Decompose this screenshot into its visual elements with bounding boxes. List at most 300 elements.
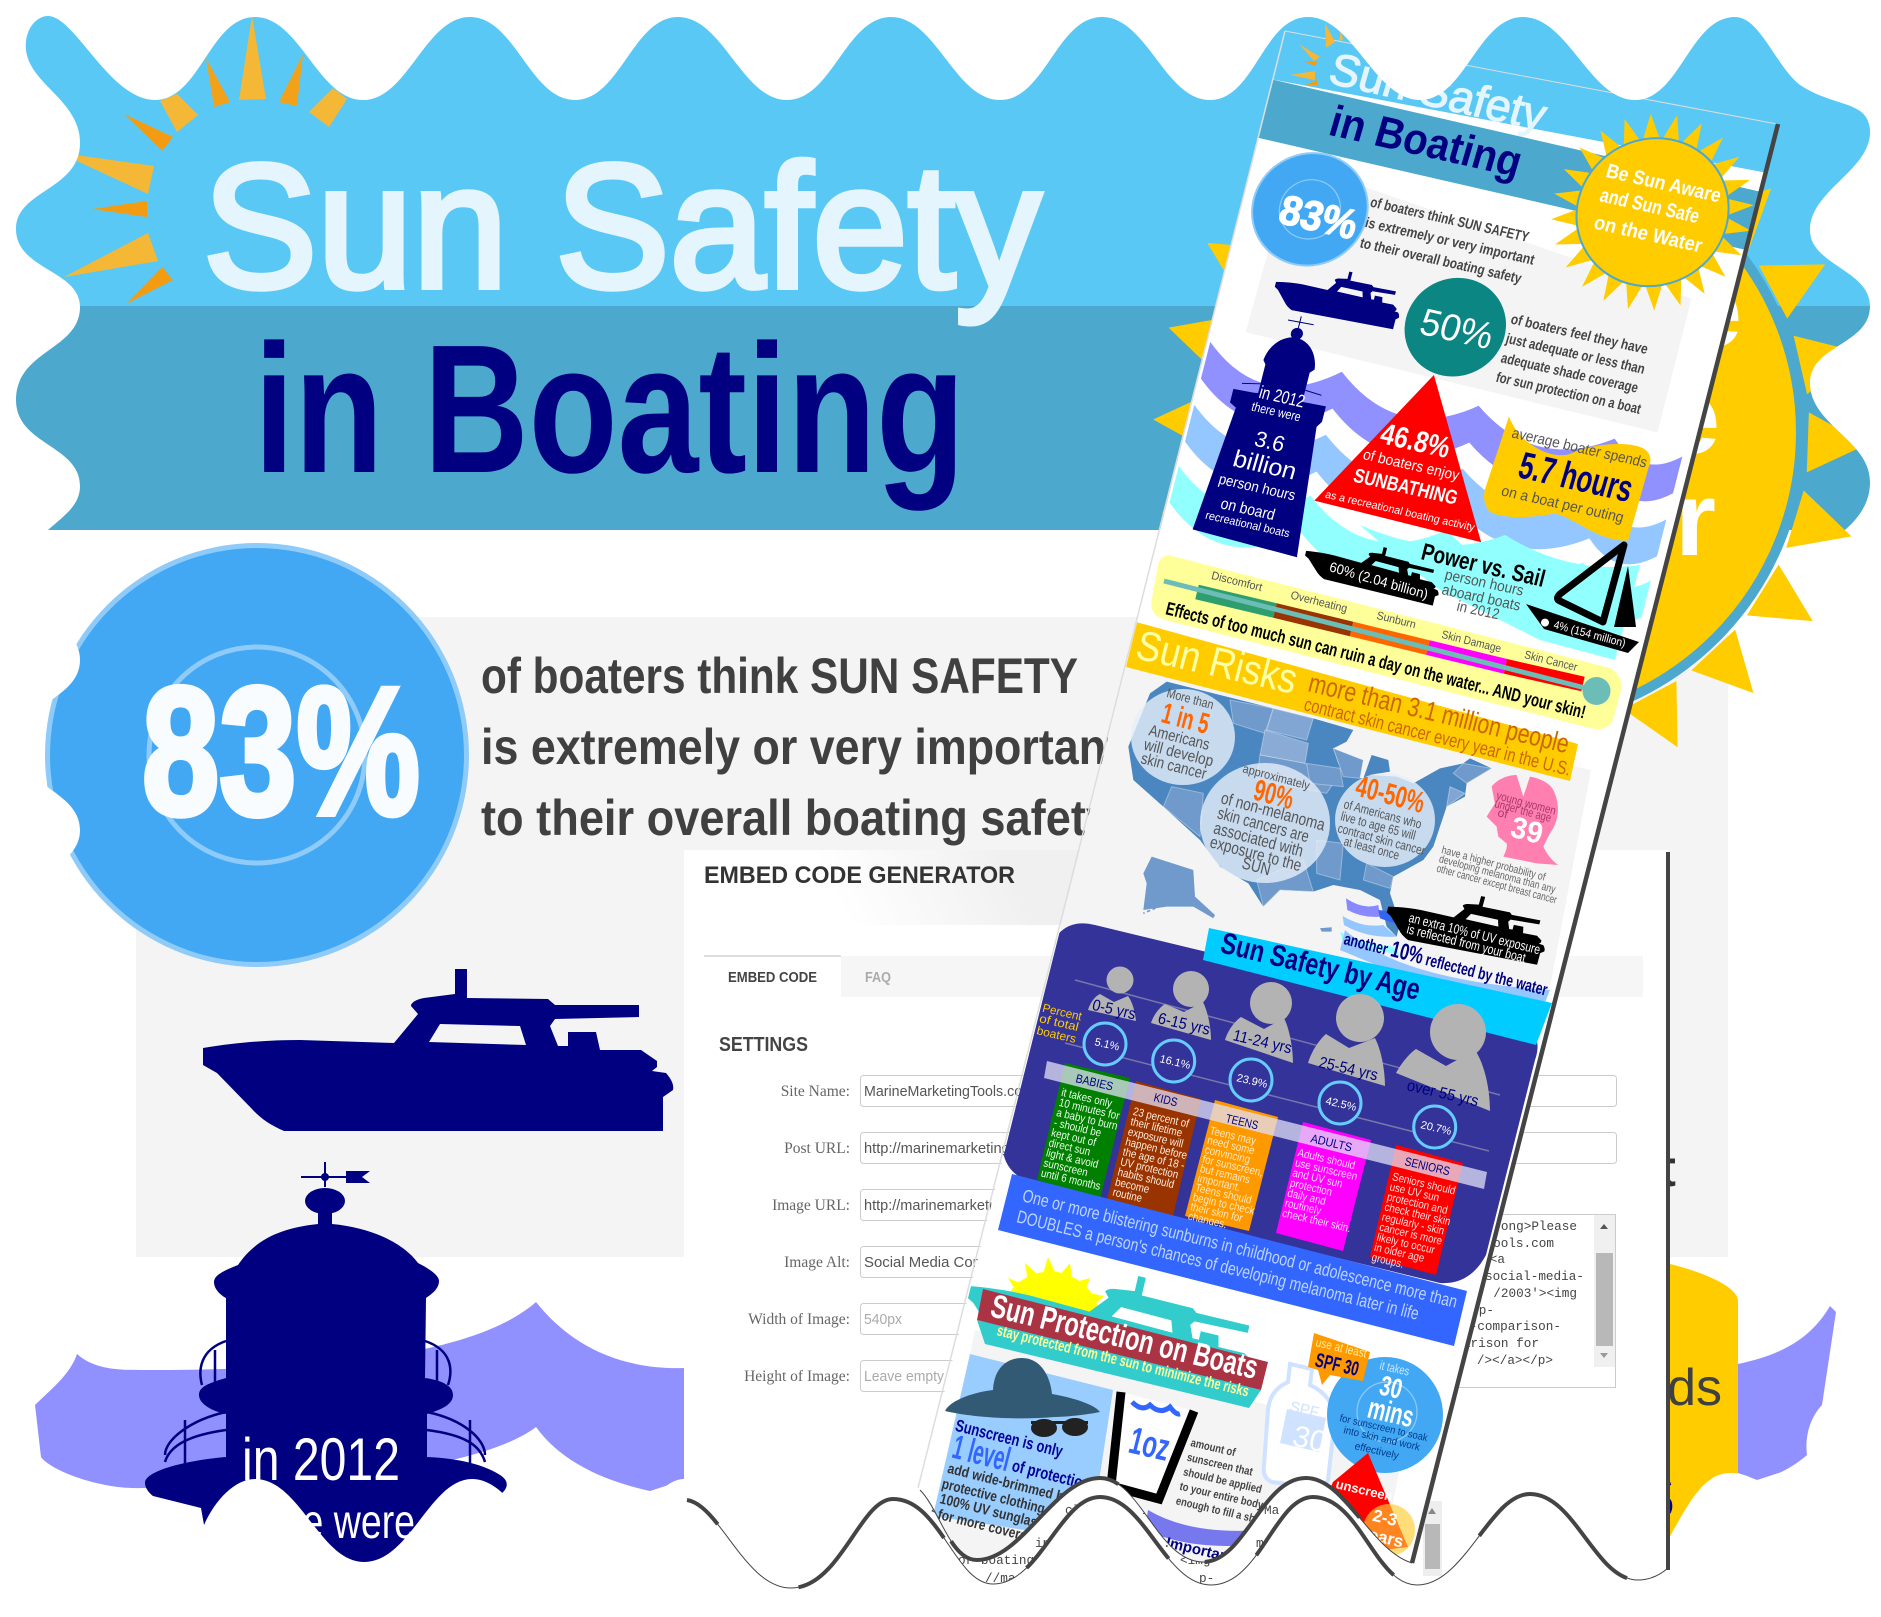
settings form: Social Media Comparison	[864, 1255, 1034, 1271]
icon: shot glass 1oz: 1oz	[1125, 1420, 1174, 1470]
column text: adults: check their skin.	[1281, 1207, 1352, 1235]
settings form: MarineMarketingTools.com	[864, 1084, 1034, 1100]
text: amount of sunscreen: to your entire body -	[1178, 1480, 1271, 1513]
text: amount of sunscreen: enough to fill a shot	[1174, 1495, 1265, 1528]
column text: seniors: use UV sun	[1388, 1181, 1441, 1205]
embed code textarea: <a	[1490, 1252, 1505, 1267]
effects severity bar	[1164, 581, 1610, 705]
grey block: sun risks map background	[1050, 667, 1591, 1040]
bubble text: 1 in 5: Americans	[1147, 722, 1211, 754]
bubble text: 1 in 5: skin cancer	[1139, 750, 1209, 783]
lower code box	[931, 1501, 1442, 1586]
yellow flag: 5.7 hours: 5.7 hours	[1514, 445, 1638, 511]
column text: teens: for sunscreen,	[1201, 1153, 1264, 1180]
column text: kids: their lifetime	[1129, 1115, 1184, 1140]
icon: black power boat	[1305, 547, 1439, 606]
column headings: KIDS	[1152, 1090, 1179, 1109]
icon: small yellow sun	[1005, 1257, 1104, 1325]
column text: kids: habits should	[1116, 1166, 1176, 1191]
effects labels: Sunburn	[1375, 610, 1417, 631]
blue box: hat and sunscreen tip	[933, 1354, 1113, 1548]
stat circle 83% on page: 83%	[1274, 186, 1363, 248]
column text: adults: routinely	[1283, 1197, 1323, 1218]
age labels: 0-5 yrs	[1090, 997, 1137, 1023]
column text: kids: routine	[1111, 1186, 1143, 1205]
icon: boat silhouette	[203, 969, 673, 1131]
percent values: 42.5%	[1324, 1095, 1358, 1114]
ribbon text fragments: hours	[1432, 1440, 1676, 1539]
bubble text: 40-50%: 40-50%	[1352, 770, 1428, 820]
effects caption: Effects of too much sun can ruin a day on the water... AND your skin!	[1164, 598, 1588, 722]
bubble text: 1 in 5	[1140, 688, 1213, 779]
lower code box: in	[1035, 1536, 1050, 1551]
age labels: over 55 yrs	[1405, 1077, 1480, 1110]
bubble text: 40-50%: at least once	[1342, 833, 1401, 863]
bubble text: 1 in 5: 1 in 5	[1158, 697, 1213, 741]
settings form: Post URL:	[784, 1140, 850, 1157]
column text: kids: exposure will	[1126, 1126, 1185, 1151]
settings form: Image URL:	[772, 1197, 850, 1214]
big sun text: Safe	[1498, 359, 1720, 476]
yellow flag: 5.7 hours: on a boat per outing	[1499, 483, 1626, 526]
settings form	[744, 1076, 1616, 1392]
text: 50% of boaters: adequate shade coverage	[1499, 351, 1640, 397]
effects labels: Overheating	[1289, 590, 1348, 615]
text: 83% of boaters	[1360, 198, 1535, 286]
icon: sunscreen bottle: SPF	[1288, 1398, 1321, 1421]
blue box: hat and sunscreen tip: for more coverage	[936, 1507, 1042, 1548]
band: sun protection on boats	[977, 1287, 1268, 1408]
effects labels	[1210, 570, 1579, 674]
embed code textarea: /></a></p>	[1477, 1353, 1553, 1368]
text: melanoma risk: other cancer except breast cancer	[1435, 863, 1558, 907]
lower code box: or-boating	[958, 1553, 1034, 1568]
cyan wave behind power vs sail	[1360, 525, 1640, 660]
wavy white mask: lower poster edges	[0, 530, 1881, 1617]
age labels: 11-24 yrs	[1231, 1027, 1294, 1057]
icon: sunscreen bottle: 30	[1289, 1420, 1330, 1459]
red triangle: 46.8% sunbathing: of boaters enjoy	[1361, 446, 1462, 484]
column text: seniors: protection and	[1386, 1191, 1449, 1217]
column headings: ADULTS	[1309, 1131, 1354, 1154]
bubble text: 40-50%: of Americans who	[1342, 796, 1423, 832]
column text: seniors: regularly - skin	[1380, 1211, 1446, 1238]
blue circle: 30 mins: into skin and work	[1342, 1425, 1422, 1454]
lighthouse on page: there were	[1250, 399, 1303, 424]
column text: seniors: groups.	[1370, 1251, 1405, 1271]
heading: Sun Safety by Age: Sun Safety by Age	[1217, 927, 1424, 1007]
panel: sun safety by age	[1002, 923, 1552, 1283]
lighthouse on page: recreational boats	[1204, 510, 1291, 540]
blue circle: 30 mins: for sunscreen to soak	[1338, 1413, 1429, 1444]
icon: sailboat: 4% (154 million)	[1552, 619, 1627, 650]
band: Sun Safety by Age	[1203, 928, 1552, 1045]
percent values: 16.1%	[1158, 1053, 1192, 1072]
effects labels: Skin Cancer	[1523, 649, 1579, 674]
page background	[934, 80, 1764, 1510]
red triangle: 46.8% sunbathing	[1314, 375, 1482, 542]
settings form: Width of Image:	[748, 1311, 850, 1328]
red triangle: 46.8% sunbathing: SUNBATHING	[1351, 465, 1460, 509]
ribbon: blistering sunburns: DOUBLES a person's chances of developing melanoma later in life	[1015, 1206, 1421, 1324]
red triangle: 46.8% sunbathing: 46.8%	[1377, 418, 1454, 465]
column headings: SENIORS	[1403, 1154, 1452, 1178]
band: sun risks: Sun Risks	[1132, 621, 1302, 703]
column text: seniors: cancer is more	[1378, 1221, 1444, 1248]
lighthouse on page: 3.6	[1252, 426, 1288, 457]
column text: kids: become	[1114, 1176, 1151, 1196]
embed code textarea: /2003'><img	[1493, 1286, 1577, 1301]
icon: lighthouse	[145, 1162, 507, 1600]
column text: babies: it takes only	[1060, 1086, 1114, 1111]
column headings: TEENS	[1224, 1111, 1260, 1132]
power vs sail	[1305, 542, 1639, 653]
tabs: EMBED CODE	[728, 970, 817, 986]
page title: in Boating: in Boating	[1324, 97, 1528, 187]
boat text: UV exposure: an extra 10% of UV exposure	[1407, 910, 1542, 957]
bubble text: 90%: of non-melanoma	[1219, 788, 1327, 835]
column text: teens: convincing	[1203, 1144, 1252, 1167]
icon: shot glass 1oz	[1111, 1392, 1194, 1499]
lower code box: .@	[1163, 1536, 1179, 1551]
grey block: sun protection	[930, 1330, 1405, 1570]
speech bubble: SPF 30: SPF 30	[1313, 1350, 1361, 1381]
stat circle 83% on page	[1251, 152, 1369, 267]
bubble text: 90%: SUN	[1240, 853, 1273, 879]
tip text: Sunscreen is only	[953, 1416, 1065, 1461]
label: percent of total boaters: boaters	[1035, 1023, 1078, 1046]
text block: 83% explanation	[481, 648, 1121, 846]
small sun rays on page header	[1290, 23, 1343, 85]
panel heading: EMBED CODE GENERATOR	[704, 862, 1015, 889]
blue circle: 30 mins: effectively	[1353, 1441, 1401, 1462]
icon: sunglasses	[1031, 1418, 1088, 1437]
blue circle: 30 mins: it takes	[1378, 1358, 1411, 1379]
boat text: UV exposure	[1406, 915, 1540, 962]
embed code textarea: <strong>Please	[1470, 1219, 1577, 1234]
big sun with rays	[1152, 74, 1868, 790]
upper page items over waves	[1473, 97, 1776, 550]
speech bubble: SPF 30: use at least	[1314, 1335, 1369, 1361]
reflection scallops	[1340, 930, 1550, 1002]
waves on page	[1159, 342, 1689, 634]
stat bubbles over map	[1131, 689, 1435, 883]
lower code box: m	[1256, 1536, 1264, 1551]
settings form: 540px	[864, 1312, 903, 1328]
column text: seniors: in older age	[1373, 1241, 1426, 1265]
age labels: 6-15 yrs	[1156, 1010, 1212, 1039]
periwinkle wave near bottom	[1145, 1510, 1260, 1546]
column text: teens: important.	[1196, 1172, 1242, 1194]
column text: kids: the age of 18 -	[1121, 1146, 1186, 1172]
percent values: 20.7%	[1419, 1119, 1453, 1138]
effects panel	[1151, 555, 1621, 729]
speech bubble: SPF 30	[1308, 1333, 1370, 1385]
column text: teens: but remains	[1199, 1163, 1251, 1187]
percent values	[1093, 1036, 1453, 1138]
lower code box: ib	[1142, 1503, 1157, 1518]
US map	[1128, 682, 1492, 937]
periwinkle wave	[35, 1302, 684, 1491]
yellow flag: 5.7 hours: average boater spends	[1510, 425, 1649, 471]
column text: adults: use sunscreen	[1294, 1157, 1359, 1183]
text: 50% of boaters: just adequate or less than	[1503, 331, 1647, 378]
bubble text: 90%: associated with	[1212, 818, 1305, 861]
sun badge: Be Sun Aware: on the Water	[1591, 212, 1705, 257]
bubble text: 40-50%: contract skin cancer	[1336, 820, 1427, 858]
page title: Sun Safety: Sun Safety	[1324, 43, 1553, 141]
text: 83% of boaters: is extremely or very important	[1363, 215, 1536, 269]
icon: pink head with age 39: under the age	[1493, 796, 1553, 825]
lighthouse on page: billion	[1230, 445, 1300, 485]
column text: adults: Adults should	[1296, 1147, 1357, 1172]
icon: black boat with UV reflection	[1386, 896, 1545, 965]
sun badge: Be Sun Aware: and Sun Safe	[1597, 185, 1702, 228]
lower code box: Ma	[1264, 1503, 1280, 1518]
bubble text: 40-50%	[1338, 776, 1426, 860]
small waves by reflection boat	[1340, 898, 1400, 955]
settings form: Site Name:	[781, 1083, 850, 1100]
icon: pink head with age 39: 39	[1507, 811, 1546, 851]
text block: 83% explanation: is extremely or very important	[481, 719, 1121, 775]
header band: darker blue	[0, 306, 1881, 530]
label: percent of total boaters: Percent	[1041, 1001, 1084, 1024]
panel: embed code generator	[684, 850, 1668, 1597]
percent values: 23.9%	[1235, 1072, 1269, 1091]
column text: kids: UV protection	[1119, 1156, 1180, 1182]
column text: babies: direct sun	[1047, 1137, 1092, 1159]
lighthouse text: there were	[238, 1496, 415, 1549]
power vs sail: 60% (2.04 billion)	[1328, 558, 1430, 602]
age columns	[1037, 1063, 1463, 1275]
stat circle 50%: 50%	[1415, 302, 1498, 358]
red triangle: 46.8% sunbathing: as a recreational boating activity	[1324, 489, 1477, 534]
column text: babies: a baby to burn	[1055, 1106, 1119, 1133]
column text: babies: - should be	[1052, 1117, 1103, 1140]
icon: wide-brimmed hat	[945, 1358, 1100, 1418]
label: percent of total boaters: of total	[1038, 1011, 1080, 1034]
lighthouse text: in 2012	[242, 1426, 400, 1493]
bubble text: 90%: 90%	[1250, 774, 1297, 816]
icon: sun rays around title	[64, 16, 347, 304]
text: another 10% reflected: another 10% reflected by the water	[1342, 924, 1551, 1001]
text: melanoma risk	[1435, 844, 1558, 907]
column text: babies: until 6 months	[1040, 1167, 1102, 1193]
bubble text: 1 in 5: will develop	[1141, 736, 1215, 770]
title: Sun Safety: Sun Safety	[203, 129, 1041, 325]
lower code box: //ma	[985, 1571, 1016, 1586]
icon: sunscreen bottle	[1264, 1364, 1335, 1488]
embed code textarea: wp-	[1471, 1303, 1494, 1318]
column text: babies: kept out of	[1050, 1127, 1097, 1149]
power vs sail: in 2012	[1455, 598, 1501, 623]
lavender age bar	[1044, 1061, 1487, 1189]
panel wave outline	[687, 852, 1668, 1588]
column text: babies: 10 minutes for	[1057, 1096, 1121, 1123]
periwinkle wave right	[1738, 1306, 1836, 1480]
band: sun risks: contract skin cancer every year in the U.S.	[1302, 694, 1573, 781]
white fill below panel wave	[684, 1494, 1668, 1617]
percent values: 5.1%	[1093, 1036, 1121, 1054]
percent rings	[1084, 1023, 1456, 1148]
column text: kids: happen before	[1124, 1136, 1189, 1162]
sun badge: Be Sun Aware: Be Sun Aware	[1603, 160, 1724, 207]
sun badge: Be Sun Aware	[1551, 114, 1754, 310]
text: 50% of boaters: of boaters feel they have	[1509, 312, 1650, 358]
wavy white mask: top, left and right edges	[0, 0, 1881, 530]
lighthouse on page: person hours	[1217, 471, 1297, 504]
blue box: hat and sunscreen tip: 1 level	[949, 1428, 1014, 1479]
stat circle: 83%	[45, 543, 469, 967]
column text: adults: and UV sun	[1291, 1167, 1344, 1191]
effects labels: Skin Damage	[1440, 629, 1502, 655]
settings form: Height of Image:	[744, 1368, 850, 1385]
power vs sail: person hours	[1443, 566, 1525, 600]
blue circle: 30 mins	[1327, 1357, 1443, 1473]
age figures	[1088, 966, 1490, 1111]
title: in Boating: in Boating	[254, 306, 965, 511]
big sun text: Aware	[1429, 252, 1742, 369]
band: sun risks: more than 3.1 million people	[1306, 668, 1572, 759]
text: melanoma risk: have a higher probability of	[1440, 844, 1547, 884]
column headings	[1074, 1071, 1452, 1178]
page grey block	[1246, 188, 1691, 432]
column text: teens: Teens may	[1208, 1125, 1258, 1148]
icon: boat on page	[1274, 272, 1400, 330]
ribbon text fragments	[1432, 1140, 1722, 1539]
big sun text: Water	[1428, 461, 1716, 578]
text block: 83% explanation: to their overall boating safety	[481, 790, 1111, 846]
bubble text: 90%: exposure to the	[1208, 832, 1303, 875]
big sun text	[1428, 252, 1742, 578]
column text: teens: changes.	[1187, 1210, 1228, 1232]
text block: 83% explanation: of boaters think SUN SAFETY	[481, 648, 1078, 704]
icon: pink head with age 39: young women	[1495, 788, 1557, 818]
lower code box: p-	[1199, 1571, 1214, 1586]
lighthouse on page	[1192, 316, 1326, 558]
page header band light	[1268, 25, 1783, 173]
ribbon text fragments: spends	[1554, 1359, 1722, 1417]
column text: adults: daily and	[1286, 1187, 1327, 1208]
embed code textarea	[1300, 1214, 1616, 1388]
lower code box: <img	[1180, 1553, 1210, 1568]
column text: seniors: check their skin	[1383, 1201, 1452, 1229]
band: sun risks	[1126, 621, 1578, 781]
text: amount of sunscreen: amount of	[1189, 1436, 1237, 1460]
column text: seniors: likely to occur	[1375, 1231, 1437, 1257]
blue circle: 30 mins: 30	[1377, 1370, 1406, 1405]
icon: teal boat	[957, 1238, 1276, 1407]
embed code textarea: /social-media-	[1477, 1269, 1584, 1284]
column text: seniors: Seniors should	[1391, 1171, 1457, 1198]
power vs sail: aboard boats	[1440, 581, 1522, 615]
grey content block	[136, 617, 1728, 1257]
lighthouse on page: on board	[1219, 496, 1277, 524]
text: 83% of boaters: of boaters think SUN SAFETY	[1368, 195, 1531, 246]
band: sun protection on boats: Sun Protection on Boats	[987, 1287, 1262, 1386]
rotated infographic page	[934, 54, 1764, 1562]
column text: teens: need some	[1206, 1134, 1256, 1157]
column text: teens: begin to check	[1191, 1191, 1256, 1218]
bubble text: 1 in 5: More than	[1165, 685, 1215, 712]
text: important sunscreen: Important sunscreen	[1164, 1534, 1313, 1584]
red triangle: reapply sunscreen: ears	[1367, 1525, 1406, 1551]
guide lines	[1065, 980, 1500, 1151]
label: percent of total boaters	[1035, 1001, 1084, 1046]
age labels	[1090, 997, 1480, 1110]
red triangle: reapply sunscreen: 2-3	[1371, 1506, 1399, 1530]
column text: teens: their skin for	[1189, 1201, 1244, 1225]
bubble text: 90%: approximately	[1241, 761, 1311, 793]
icon: pink head with age 39: of	[1496, 805, 1510, 822]
embed code textarea: -comparison-	[1470, 1319, 1561, 1334]
column headings: BABIES	[1074, 1071, 1115, 1093]
settings heading: SETTINGS	[719, 1034, 808, 1056]
settings form: http://marinemarketingtools.com/social	[864, 1141, 1114, 1157]
column text: teens: Teens should	[1194, 1182, 1253, 1207]
column text: babies: light & avoid	[1045, 1147, 1100, 1171]
blue box: hat and sunscreen tip: add wide-brimmed hat	[946, 1461, 1076, 1508]
page section: header through boating stats	[1150, 25, 1783, 636]
text: 50% of boaters: for sun protection on a boat	[1494, 370, 1643, 418]
lower code box: <or	[931, 1504, 954, 1519]
page header band dark	[1248, 79, 1770, 251]
lower code box: clu	[1065, 1503, 1088, 1518]
stat circle: 83%: 83%	[142, 649, 420, 853]
bubble text: 40-50%: live to age 65 will	[1339, 808, 1417, 843]
ribbon: blistering sunburns: One or more blistering sunburns in childhood or adolescence more than	[1020, 1185, 1459, 1312]
text: amount of sunscreen: should be applied	[1182, 1466, 1263, 1496]
lighthouse text	[238, 1426, 415, 1549]
stat circle 50%	[1404, 278, 1506, 376]
text: 83% of boaters: to their overall boating safety	[1358, 236, 1523, 287]
red triangle: reapply sunscreen	[1300, 1453, 1415, 1560]
tabs	[704, 955, 1643, 997]
blue circle: 30 mins: mins	[1364, 1392, 1417, 1434]
settings form: Image Alt:	[784, 1254, 850, 1271]
embed code textarea: arison for	[1463, 1336, 1539, 1351]
boat text: UV exposure: is reflected from your boat	[1405, 921, 1527, 965]
ribbon text fragments: boat	[1566, 1140, 1676, 1198]
column text: adults: protection	[1289, 1177, 1334, 1199]
icon: pink head with age 39	[1487, 775, 1558, 865]
text: amount of sunscreen: sunscreen that	[1186, 1451, 1254, 1479]
lighthouse on page: in 2012	[1257, 382, 1307, 412]
settings form: Leave empty	[864, 1369, 945, 1385]
column text: kids: 23 percent of	[1132, 1105, 1190, 1131]
bubble text: 90%: skin cancers are	[1216, 803, 1311, 846]
power vs sail: Power vs. Sail	[1419, 539, 1548, 593]
settings form: http://marinemarketingtools.com/image	[864, 1198, 1114, 1214]
tabs: FAQ	[865, 970, 891, 986]
text: 50% of boaters	[1496, 315, 1648, 414]
yellow flag: 5.7 hours	[1479, 416, 1655, 542]
band: sun protection on boats: stay protected from the sun to minimize the risks	[995, 1322, 1251, 1401]
icon: sailboat	[1526, 545, 1639, 653]
page edges and wave outline	[918, 31, 1778, 1563]
blue box: hat and sunscreen tip: protective clothing and	[940, 1476, 1070, 1523]
column text: babies: sunscreen	[1042, 1157, 1089, 1180]
header band: light blue	[0, 0, 1881, 306]
blue box: hat and sunscreen tip: of protection	[1010, 1456, 1092, 1494]
bubble text: 90%	[1210, 766, 1324, 876]
blue box: hat and sunscreen tip: 100% UV sunglasses	[938, 1491, 1058, 1536]
embed code textarea: marinetools.com	[1440, 1236, 1554, 1251]
age labels: 25-54 yrs	[1317, 1054, 1380, 1084]
text: melanoma risk: developing melanoma than any	[1438, 853, 1557, 896]
yellow ribbon	[1600, 1255, 1738, 1560]
lower code box: 'h	[947, 1536, 962, 1551]
